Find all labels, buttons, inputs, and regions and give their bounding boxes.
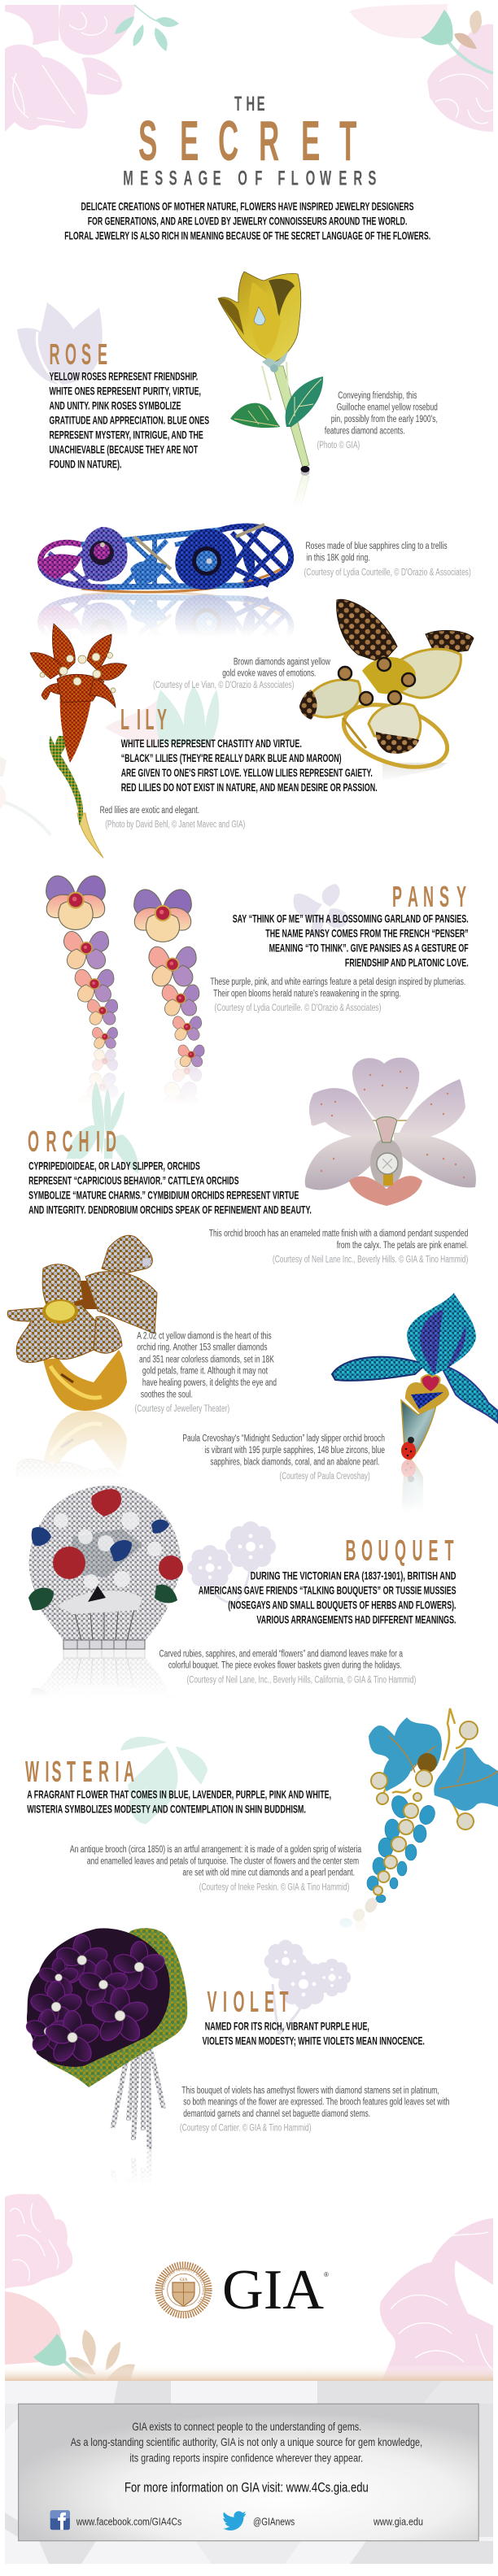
jewel: brown diamond ring — [299, 599, 474, 779]
reflection: bouquet brooch — [32, 1649, 163, 1691]
logo: GIA seal: KNOWLEDGE INTEGRITY EXCELLENCE 1931 — [163, 2269, 205, 2304]
logo: GIA seal: GIA — [180, 2278, 188, 2282]
text: rose meaning: AND UNITY. PINK ROSES SYMBOLIZE — [49, 398, 181, 411]
heading: lily: LILY — [120, 703, 167, 737]
icon: mint wisteria motif — [120, 1737, 208, 1824]
caption: orchid ring: (Courtesy of Jewellery Theater) — [135, 1404, 229, 1414]
heading: bouquet: BOUQUET — [345, 1534, 454, 1568]
text: GIA mission: its grading reports inspire confidence wherever they appear. — [129, 2451, 363, 2464]
caption: orchid ring: have healing powers, it delights the eye and — [142, 1378, 277, 1388]
jewel: violet bouquet brooch — [24, 1928, 187, 2149]
link: facebook: www.facebook.com/GIA4Cs — [76, 2516, 182, 2528]
caption: lily brooch — [100, 806, 245, 830]
logo: GIA wordmark: ® — [324, 2271, 329, 2278]
logo: GIA seal — [155, 2261, 212, 2319]
heading: orchid: ORCHID — [28, 1125, 116, 1159]
caption: orchid ring: orchid ring. Another 153 smaller diamonds — [137, 1343, 268, 1353]
caption: bouquet brooch: Carved rubies, sapphires, and emerald “flowers” and diamond leaves make for a — [159, 1649, 403, 1659]
text: lily meaning: “BLACK” LILIES (THEY'RE REALLY DARK BLUE AND MAROON) — [121, 751, 342, 764]
caption: violet brooch: (Courtesy of Cartier. © GIA & Tino Hammid) — [180, 2124, 312, 2134]
jewel: midnight seduction lady slipper brooch — [332, 1293, 498, 1460]
reflection: brown diamond ring — [382, 763, 448, 777]
icon: lavender tulip behind rose — [17, 302, 103, 385]
caption: orchid ring: gold petals, frame it. Although it may not — [142, 1367, 269, 1377]
jewel: yellow rosebud pin — [218, 272, 323, 472]
title: THE — [234, 93, 265, 115]
title: SECRET — [138, 109, 357, 172]
icon: mint orchid motif — [67, 1081, 138, 1173]
panel: info card — [19, 2404, 478, 2541]
jewel: enamel orchid brooch — [305, 1058, 476, 1206]
caption: orchid brooch — [209, 1229, 468, 1265]
reflection: wisteria brooch — [339, 1918, 366, 1928]
title: MESSAGE OF FLOWERS — [123, 168, 376, 190]
text: rose meaning: WHITE ONES REPRESENT PURITY, VIRTUE, — [49, 384, 201, 397]
text: orchid meaning: CYPRIPEDIOIDEAE, OR LADY SLIPPER, ORCHIDS — [28, 1160, 200, 1173]
reflection: pansy earrings — [83, 1049, 202, 1099]
text: violet meaning — [203, 2019, 425, 2047]
caption: lily brooch: (Photo by David Behl, © Janet Mavec and GIA) — [105, 820, 245, 830]
decoration: top-left flower and leaves — [5, 5, 179, 132]
caption: rose pin: (Photo © GIA) — [317, 441, 360, 450]
caption: pansy earrings: Their open blooms herald nature's reawakening in the spring. — [213, 989, 401, 999]
panel: grey facet background — [5, 2381, 493, 2564]
jewel: yellow diamond orchid ring — [7, 1235, 157, 1411]
text: violet meaning: NAMED FOR ITS RICH, VIBRANT PURPLE HUE, — [205, 2019, 369, 2032]
text: more information: For more information on GIA visit: www.4Cs.gia.edu — [124, 2481, 369, 2496]
caption: lily brooch: Red lilies are exotic and elegant. — [100, 806, 199, 816]
text: pansy meaning — [233, 912, 469, 968]
text: bouquet meaning — [199, 1569, 456, 1626]
caption: pansy earrings: (Courtesy of Lydia Courteille. © D'Orazio & Associates) — [215, 1003, 382, 1013]
decoration: footer left flower, bud and leaves — [5, 2194, 135, 2381]
caption: midnight seduction: sapphires, black diamonds, coral, and an abalone pearl. — [210, 1457, 379, 1467]
text: wisteria meaning: A FRAGRANT FLOWER THAT COMES IN BLUE, LAVENDER, PURPLE, PINK AND WHITE, — [27, 1787, 331, 1800]
caption: brown diamond ring — [153, 657, 330, 690]
text: rose meaning: FOUND IN NATURE). — [49, 457, 122, 470]
caption: bouquet brooch — [159, 1649, 416, 1685]
text: GIA mission — [71, 2420, 422, 2464]
caption: orchid ring: soothes the soul. — [141, 1390, 193, 1399]
caption: violet brooch: demantoid garnets and channel set baguette diamond stems. — [183, 2109, 370, 2119]
text: rose meaning: REPRESENT MYSTERY, INTRIGUE, AND THE — [49, 428, 203, 441]
caption: orchid ring — [135, 1331, 277, 1414]
text: orchid meaning — [28, 1160, 312, 1216]
text: orchid meaning: REPRESENT “CAPRICIOUS BEHAVIOR.” CATTLEYA ORCHIDS — [28, 1174, 238, 1187]
caption: wisteria brooch: An antique brooch (circa 1850) is an artful arrangement: it is made of a golden sprig of wisteria — [70, 1845, 362, 1855]
caption: trellis ring — [304, 542, 471, 577]
caption: rose pin: pin, possibly from the early 1900's, — [331, 415, 438, 424]
text: lily meaning — [121, 737, 378, 794]
caption: rose pin: Guilloche enamel yellow rosebud — [337, 402, 438, 412]
caption: trellis ring: in this 18K gold ring. — [307, 553, 370, 563]
logo: GIA wordmark: GIA — [222, 2259, 324, 2321]
reflection: orchid ring — [16, 1411, 127, 1472]
heading: violet: VIOLET — [207, 1986, 289, 2019]
caption: wisteria brooch: (Courtesy of Ineke Peskin. © GIA & Tino Hammid) — [199, 1882, 350, 1892]
text: rose meaning: UNACHIEVABLE (BECAUSE THEY ARE NOT — [49, 442, 198, 455]
caption: midnight seduction: Paula Crevoshay's “Midnight Seduction” lady slipper orchid brooch — [182, 1434, 385, 1444]
caption: orchid ring: A 2.02 ct yellow diamond is the heart of this — [137, 1331, 272, 1341]
icon: twitter bird — [223, 2511, 246, 2530]
caption: brown diamond ring: Brown diamonds against yellow — [234, 657, 330, 667]
jewel: pansy earrings — [46, 876, 204, 1067]
icon: lavender violet motif — [264, 1940, 351, 2034]
reflection: rose pin — [294, 471, 309, 504]
caption: rose pin: features diamond accents. — [325, 426, 405, 436]
jewel: blue sapphire trellis ring — [39, 524, 291, 592]
caption: wisteria brooch: and enamelled leaves and petals of turquoise. The cluster of flowers and the center stem — [87, 1856, 359, 1866]
decoration: top-right flower, bud and leaves — [349, 4, 493, 132]
text: lily meaning: WHITE LILIES REPRESENT CHASTITY AND VIRTUE. — [121, 737, 302, 750]
text: rose meaning — [49, 369, 209, 470]
jewel: red lily brooch — [30, 624, 127, 858]
caption: brown diamond ring: gold evoke waves of emotions. — [222, 669, 316, 679]
caption: violet brooch — [180, 2086, 449, 2134]
text: rose meaning: YELLOW ROSES REPRESENT FRIENDSHIP. — [49, 369, 198, 382]
caption: midnight seduction: is vibrant with 195 purple sapphires, 148 blue zircons, blue — [204, 1446, 385, 1456]
jewel: bouquet brooch — [28, 1486, 183, 1649]
text: orchid meaning: AND INTEGRITY. DENDROBIUM ORCHIDS SPEAK OF REFINEMENT AND BEAUTY. — [28, 1203, 312, 1216]
reflection: violet stems — [111, 2149, 151, 2176]
intro text — [64, 199, 430, 242]
icon: lavender bouquet motif — [187, 1521, 276, 1606]
caption: wisteria brooch: are set with old mine cut diamonds and a pearl pendant. — [182, 1869, 355, 1878]
caption: wisteria brooch — [70, 1845, 362, 1892]
caption: rose pin — [317, 391, 438, 450]
icon: ghost flower left edge — [0, 756, 50, 835]
caption: midnight seduction: (Courtesy of Paula Crevoshay) — [280, 1472, 370, 1482]
reflection: sapphire trellis ring — [37, 592, 294, 632]
decoration: footer right flower — [380, 2218, 493, 2381]
heading: wisteria: WISTERIA — [25, 1756, 134, 1789]
icon: facebook — [50, 2510, 70, 2530]
link: twitter: @GIAnews — [253, 2516, 295, 2528]
caption: midnight seduction — [182, 1434, 385, 1482]
caption: rose pin: Conveying friendship, this — [338, 391, 417, 401]
caption: trellis ring: Roses made of blue sapphires cling to a trellis — [306, 542, 448, 551]
text: wisteria meaning: WISTERIA SYMBOLIZES MODESTY AND CONTEMPLATION IN SHIN BUDDHISM. — [27, 1802, 306, 1815]
caption: bouquet brooch: (Courtesy of Neil Lane, Inc., Beverly Hills, California, © GIA & Tino Hammid) — [187, 1675, 416, 1685]
heading: rose: ROSE — [49, 338, 107, 372]
caption: brown diamond ring: (Courtesy of Le Vian, © D'Orazio & Associates) — [153, 681, 295, 690]
decoration: tan footer strip — [5, 2365, 493, 2381]
text: GIA mission: GIA exists to connect people to the understanding of gems. — [132, 2420, 361, 2433]
icon: lavender pansy motif — [294, 884, 349, 935]
caption: pansy earrings — [210, 977, 465, 1013]
caption: bouquet brooch: colorful bouquet. The piece evokes flower baskets given during the holidays. — [168, 1661, 402, 1671]
caption: orchid ring: and 351 near colorless diamonds, set in 18K — [139, 1355, 274, 1364]
jewel: turquoise wisteria brooch — [351, 1708, 498, 1924]
text: rose meaning: GRATITUDE AND APPRECIATION. BLUE ONES — [49, 413, 209, 426]
icon: pale lily motif — [105, 685, 219, 748]
reflection: midnight seduction — [401, 1460, 423, 1505]
heading: pansy: PANSY — [392, 881, 466, 914]
text: orchid meaning: SYMBOLIZE “MATURE CHARMS.” CYMBIDIUM ORCHIDS REPRESENT VIRTUE — [28, 1189, 299, 1202]
text: wisteria meaning — [27, 1787, 331, 1815]
title — [123, 93, 376, 190]
link: website: www.gia.edu — [373, 2516, 423, 2528]
